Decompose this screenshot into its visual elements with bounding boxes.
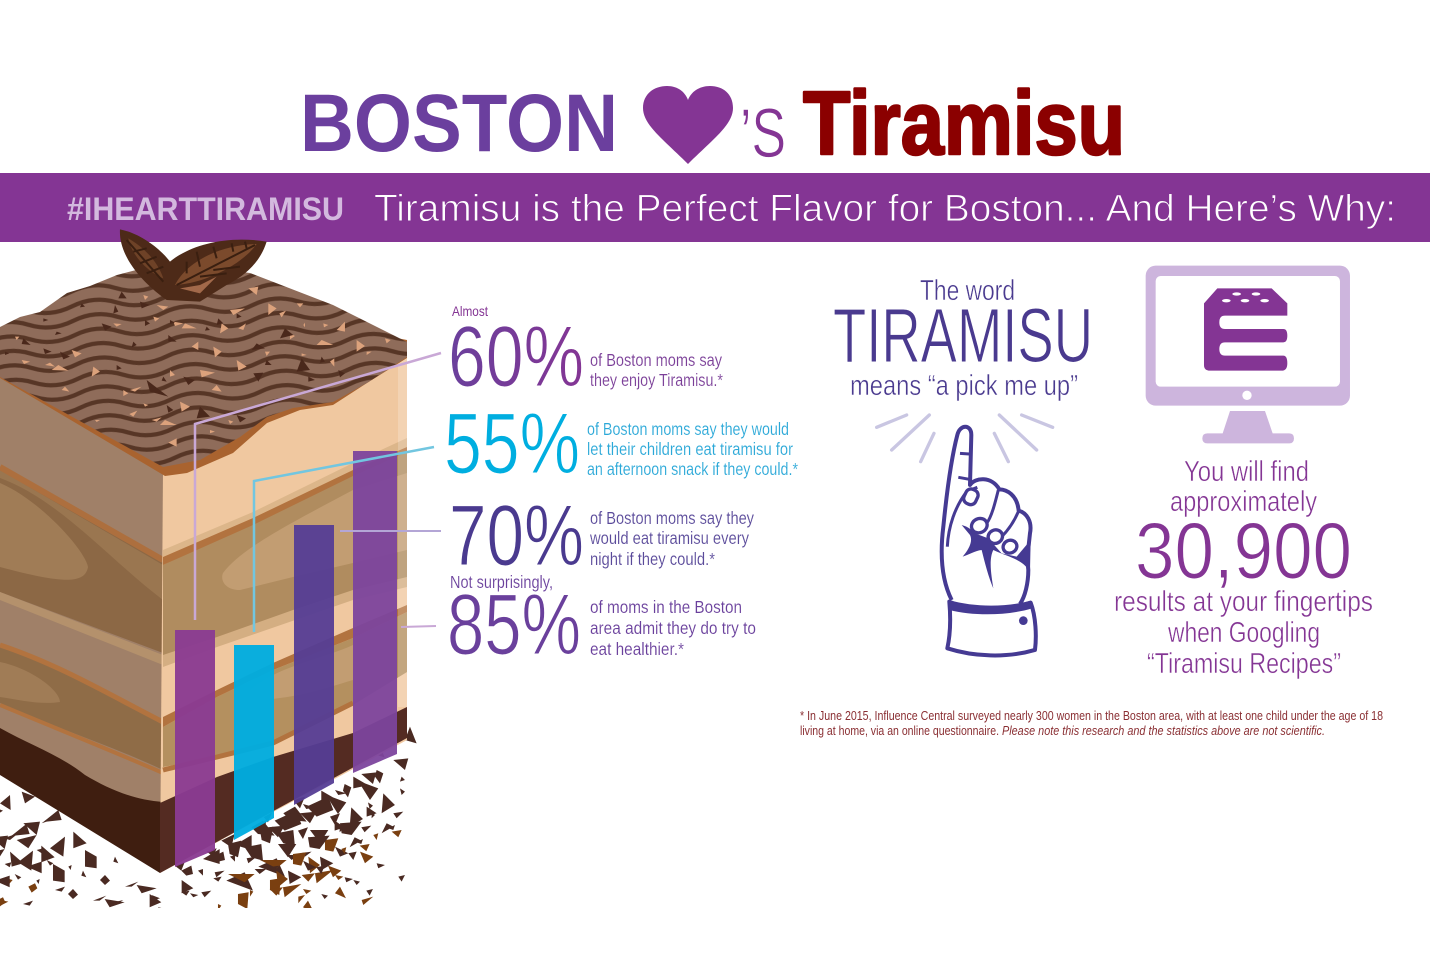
- footnote: Please note this research and the statistics above are not scientific.: [1002, 723, 1325, 738]
- intro: You will find: [1184, 456, 1309, 488]
- hand inner lines: [947, 453, 1018, 547]
- title apostrophe s: ’S: [740, 94, 786, 172]
- description: would eat tiramisu every: [589, 528, 749, 548]
- search results stat: when Googling: [1167, 617, 1320, 649]
- stat: 85 percent: [447, 572, 756, 673]
- cocoa flakes on top: [5, 287, 391, 447]
- cake left face: [0, 375, 165, 873]
- description: [587, 419, 798, 479]
- hand shadow: [962, 525, 1031, 588]
- description: of Boston moms say they: [590, 508, 754, 528]
- banner headline: Tiramisu is the Perfect Flavor for Boston... And Here’s Why:: [374, 188, 1396, 230]
- description: [590, 350, 723, 390]
- cake icon: [1204, 288, 1287, 371]
- description: of Boston moms say: [590, 350, 722, 370]
- figure: 85%: [447, 577, 581, 673]
- bar: 70 percent: [294, 525, 334, 805]
- connector line: 85 percent: [401, 626, 436, 627]
- description: they enjoy Tiramisu.*: [590, 370, 723, 390]
- description: of moms in the Boston: [590, 597, 742, 617]
- search results stat: [1114, 456, 1373, 680]
- rays: [877, 415, 1053, 462]
- closing: results at your fingertips: [1114, 586, 1373, 618]
- stat: 70 percent: [449, 488, 754, 584]
- connector line: 55 percent: [254, 447, 434, 632]
- cake rim: [0, 300, 407, 476]
- tiramisu meaning text: [833, 275, 1093, 402]
- search results stat: “Tiramisu Recipes”: [1147, 648, 1341, 680]
- stat: 55 percent: [444, 396, 798, 492]
- figure: 70%: [449, 488, 584, 584]
- chocolate leaves: [120, 229, 267, 302]
- tiramisu meaning text: The word: [920, 275, 1015, 307]
- description: area admit they do try to: [590, 618, 756, 638]
- cake illustration: [0, 229, 420, 919]
- description: [589, 508, 754, 569]
- lead-in: Not surprisingly,: [450, 572, 553, 592]
- footnote: [800, 708, 1383, 738]
- tiramisu meaning text: means “a pick me up”: [850, 370, 1078, 402]
- cuff: [947, 602, 1036, 655]
- fingernails: [962, 487, 1019, 555]
- cocoa crumbs under the cake: [0, 727, 417, 919]
- bar: 60 percent: [175, 630, 215, 867]
- connector line: 70 percent: [340, 530, 441, 532]
- icon: pointing hand: [877, 415, 1053, 655]
- lead-in: Almost: [452, 303, 488, 319]
- cake right face: [160, 355, 407, 873]
- footnote: living at home, via an online questionnaire.: [800, 723, 999, 738]
- tiramisu meaning text: TIRAMISU: [833, 293, 1093, 379]
- hand outline: [942, 427, 1031, 604]
- description: night if they could.*: [590, 549, 715, 569]
- bar chart: [175, 353, 441, 867]
- figure: 55%: [444, 396, 580, 492]
- bar: 55 percent: [234, 645, 274, 840]
- icon: heart: [643, 86, 733, 164]
- title word: Tiramisu: Tiramisu: [803, 74, 1125, 174]
- description: eat healthier.*: [590, 639, 684, 659]
- description: let their children eat tiramisu for: [587, 439, 793, 459]
- stand: [1202, 411, 1294, 443]
- figure: 30,900: [1135, 506, 1352, 595]
- hashtag: #IHEARTTIRAMISU: [67, 191, 344, 227]
- description: [590, 597, 756, 659]
- stat: 60 percent: [448, 303, 723, 405]
- screen: [1156, 276, 1340, 387]
- monitor body: [1146, 266, 1350, 406]
- cuff button: [1019, 616, 1028, 625]
- description: of Boston moms say they would: [587, 419, 789, 439]
- search results stat: approximately: [1170, 486, 1317, 518]
- power dot: [1242, 391, 1252, 400]
- description: an afternoon snack if they could.*: [587, 459, 798, 479]
- connector line: 60 percent: [195, 353, 441, 620]
- icon: computer monitor: [1146, 266, 1350, 443]
- cake top with ridged chocolate: [0, 270, 407, 467]
- bar: 85 percent: [353, 451, 397, 773]
- cake sprinkles: [1222, 292, 1269, 302]
- title word: Boston: BOSTON: [300, 78, 618, 169]
- banner: [0, 173, 1430, 242]
- figure: 60%: [448, 309, 584, 405]
- title: [300, 74, 1125, 174]
